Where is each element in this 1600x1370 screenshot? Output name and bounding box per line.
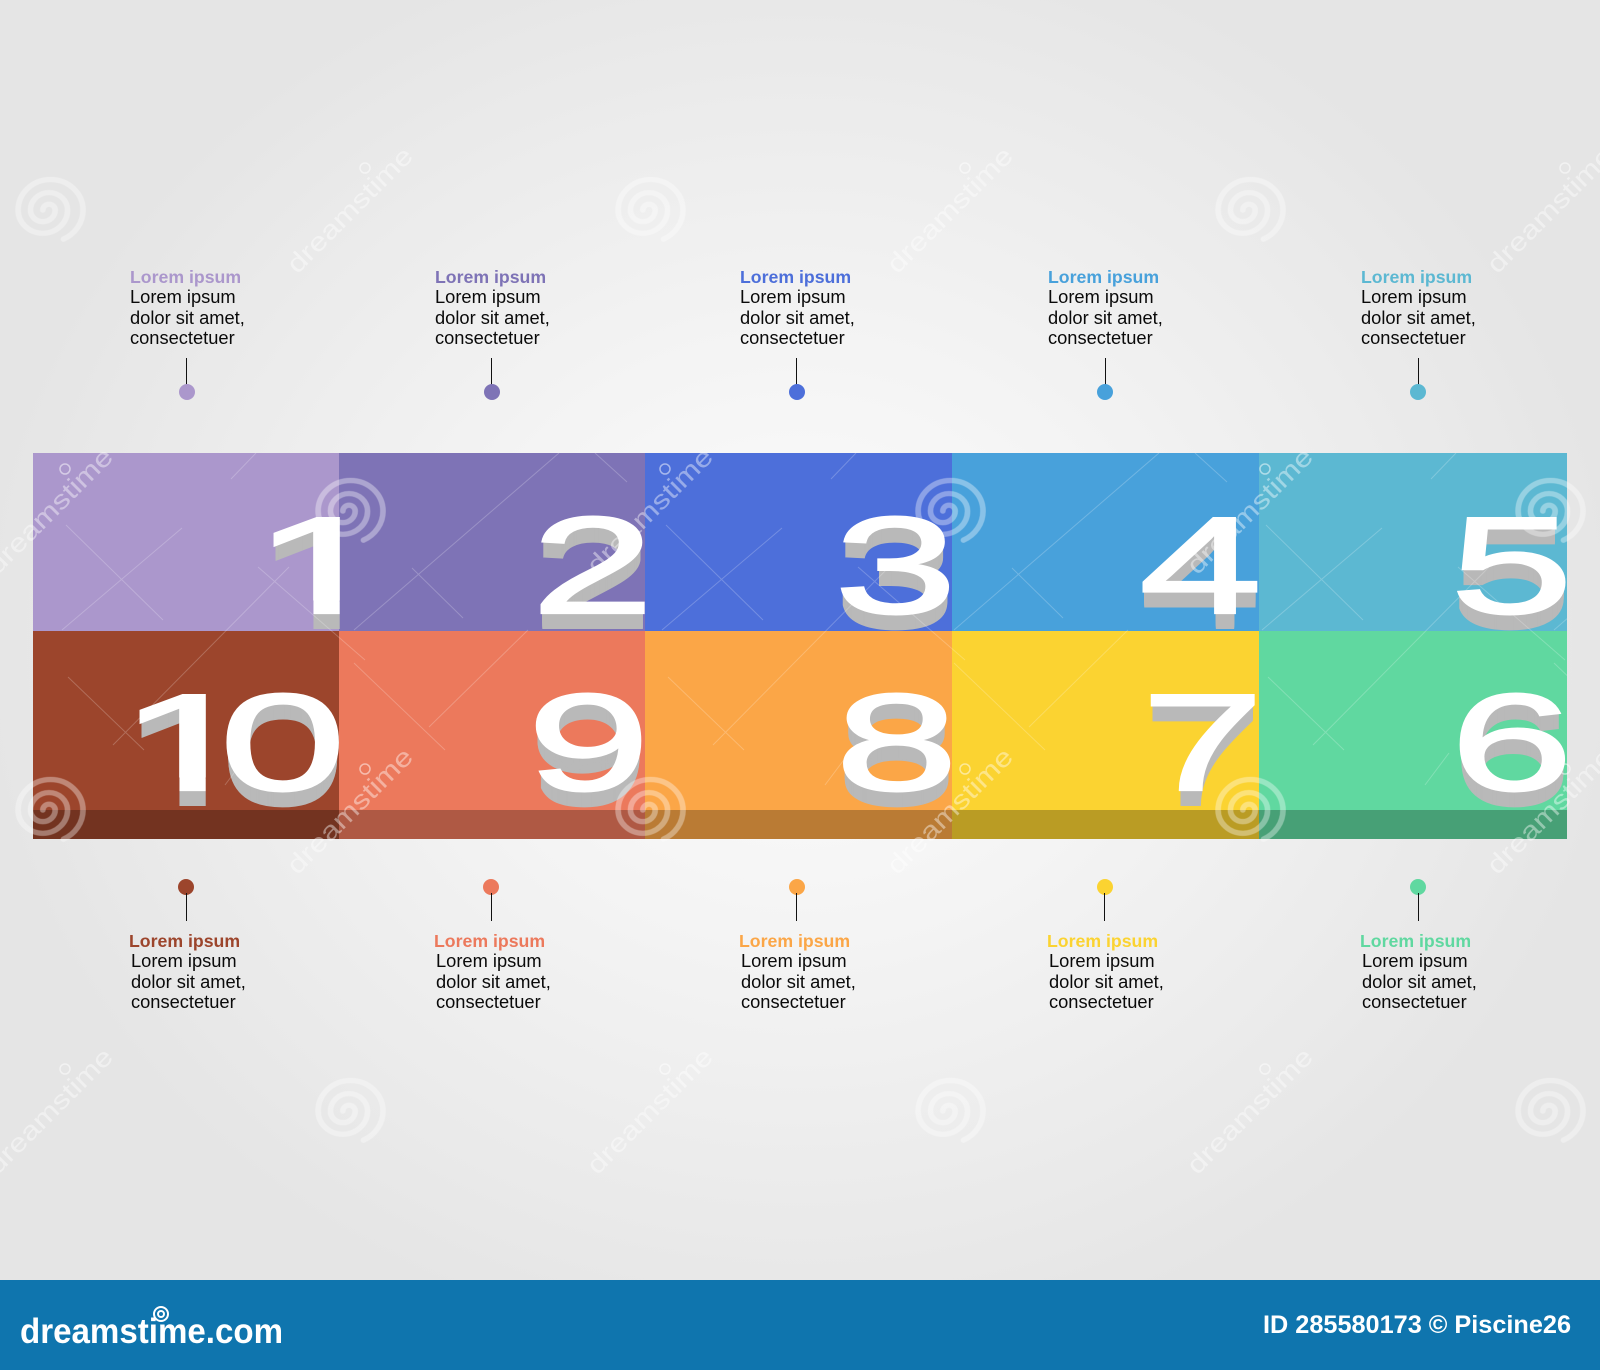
callout 8 text: consectetuer (741, 991, 846, 1012)
watermark wordmarks: dreamstime (1480, 140, 1600, 279)
number 6: 6 (1450, 666, 1573, 820)
panel: colour block grid (33, 453, 1567, 839)
block 5 (1259, 453, 1567, 631)
callout 7 text: Lorem ipsum (1047, 931, 1158, 951)
callout 1 text (130, 267, 245, 348)
callout 8 text (739, 931, 856, 1012)
number 7: 7 (1141, 666, 1264, 820)
callout 9 text: Lorem ipsum (436, 950, 542, 971)
callout 5 text: dolor sit amet, (1361, 307, 1476, 328)
callout 10 text: consectetuer (131, 991, 236, 1012)
watermark wordmarks: dreamstime (880, 140, 1019, 279)
callout 8 dot (788, 879, 804, 895)
block 2 (339, 453, 646, 631)
callout 4 text: dolor sit amet, (1048, 307, 1163, 328)
callout 2 dot (484, 384, 500, 400)
callout 4 stem (1104, 358, 1106, 386)
callout 8 text: Lorem ipsum (741, 950, 847, 971)
callout 1 text: dolor sit amet, (130, 307, 245, 328)
callout 2 text (435, 267, 550, 348)
callout 3 dot (788, 384, 804, 400)
callout 3 stem (796, 358, 797, 386)
callout 5 stem (1418, 358, 1419, 386)
callout 4 text: Lorem ipsum (1048, 286, 1154, 307)
callout 8 stem (796, 893, 797, 921)
callout 2 stem (491, 358, 492, 386)
watermark wordmarks: dreamstime (880, 741, 1019, 880)
callout 3 text: dolor sit amet, (740, 307, 855, 328)
callout 4 dot (1097, 384, 1113, 400)
block 3 (645, 453, 952, 631)
number 4: 4 (1139, 489, 1262, 643)
callout 2 text: Lorem ipsum (435, 286, 541, 307)
callout 9 text: consectetuer (436, 991, 541, 1012)
callout 3 text: Lorem ipsum (740, 267, 851, 287)
callout 3 text (740, 267, 855, 348)
watermark wordmarks: dreamstime (580, 441, 719, 580)
number 10: 0 (219, 666, 346, 820)
callout 7 text: consectetuer (1049, 991, 1154, 1012)
callout 2 text: consectetuer (435, 327, 540, 348)
callout 6 dot (1410, 879, 1426, 895)
callout 6 text: dolor sit amet, (1362, 971, 1477, 992)
callout 10 text: dolor sit amet, (131, 971, 246, 992)
callout 9 text (434, 931, 551, 1012)
watermark wordmarks: dreamstime (1480, 741, 1600, 880)
block 9 (339, 631, 646, 839)
block 10 (33, 631, 340, 839)
number 10 (140, 666, 346, 820)
footer logo spiral (154, 1307, 168, 1321)
callout 8 text: Lorem ipsum (739, 931, 850, 951)
callout 6 text (1360, 931, 1477, 1012)
callout 10 stem (186, 893, 187, 921)
callout 9 text: Lorem ipsum (434, 931, 545, 951)
number 9: 9 (527, 666, 650, 820)
block 8 (645, 631, 952, 839)
callout 5 text: consectetuer (1361, 327, 1466, 348)
number 8: 8 (835, 666, 958, 820)
number 10: 1 (117, 666, 259, 820)
callout 4 text: consectetuer (1048, 327, 1153, 348)
callout 9 text: dolor sit amet, (436, 971, 551, 992)
callout 4 text: Lorem ipsum (1048, 267, 1159, 287)
number 5: 5 (1450, 489, 1573, 643)
callout 4 text (1048, 267, 1163, 348)
footer credit: ID 285580173 © Piscine26 (1263, 1311, 1571, 1339)
callout 8 text: dolor sit amet, (741, 971, 856, 992)
number 1: 1 (251, 489, 393, 643)
callout 6 text: consectetuer (1362, 991, 1467, 1012)
block 6 (1259, 631, 1567, 839)
callout 7 text (1047, 931, 1164, 1012)
watermark wordmarks (0, 140, 1600, 1180)
callout 7 dot (1096, 879, 1112, 895)
callout 5 text: Lorem ipsum (1361, 267, 1472, 287)
watermark wordmarks: dreamstime (1180, 441, 1319, 580)
number 2: 2 (531, 489, 654, 643)
callout 1 dot (178, 384, 194, 400)
callout 5 dot (1410, 384, 1426, 400)
callout 7 stem (1104, 893, 1105, 921)
callout 9 stem (490, 893, 492, 921)
callout 7 text: dolor sit amet, (1049, 971, 1164, 992)
number 3: 3 (834, 489, 957, 643)
callout 1 text: Lorem ipsum (130, 267, 241, 287)
watermark spirals (18, 179, 1583, 1140)
callout 9 dot (483, 879, 499, 895)
callout 6 text: Lorem ipsum (1360, 931, 1471, 951)
base shadow strip (33, 810, 1567, 839)
watermark registered marks (60, 163, 1570, 1074)
watermark wordmarks: dreamstime (280, 140, 419, 279)
callout 7 text: Lorem ipsum (1049, 950, 1155, 971)
callout 3 text: consectetuer (740, 327, 845, 348)
callout 1 stem (186, 358, 187, 386)
callout 10 dot (178, 879, 194, 895)
footer wordmark: dreamstime.com (20, 1312, 283, 1351)
callout 3 text: Lorem ipsum (740, 286, 846, 307)
watermark wordmarks: dreamstime (1180, 1041, 1319, 1180)
callout 1 text: Lorem ipsum (130, 286, 236, 307)
callout 1 text: consectetuer (130, 327, 235, 348)
block 1 (33, 453, 340, 631)
callout 2 text: Lorem ipsum (435, 267, 546, 287)
callout 6 text: Lorem ipsum (1362, 950, 1468, 971)
callout 5 text (1361, 267, 1476, 348)
callout 5 text: Lorem ipsum (1361, 286, 1467, 307)
callout 10 text: Lorem ipsum (129, 931, 240, 951)
block 7 (952, 631, 1259, 839)
callout 10 text: Lorem ipsum (131, 950, 237, 971)
watermark wordmarks: dreamstime (280, 741, 419, 880)
callout 6 stem (1418, 893, 1419, 921)
callout 2 text: dolor sit amet, (435, 307, 550, 328)
block 4 (952, 453, 1259, 631)
watermark wordmarks: dreamstime (580, 1041, 719, 1180)
callout 10 text (129, 931, 246, 1012)
footer bar (0, 1280, 1600, 1370)
